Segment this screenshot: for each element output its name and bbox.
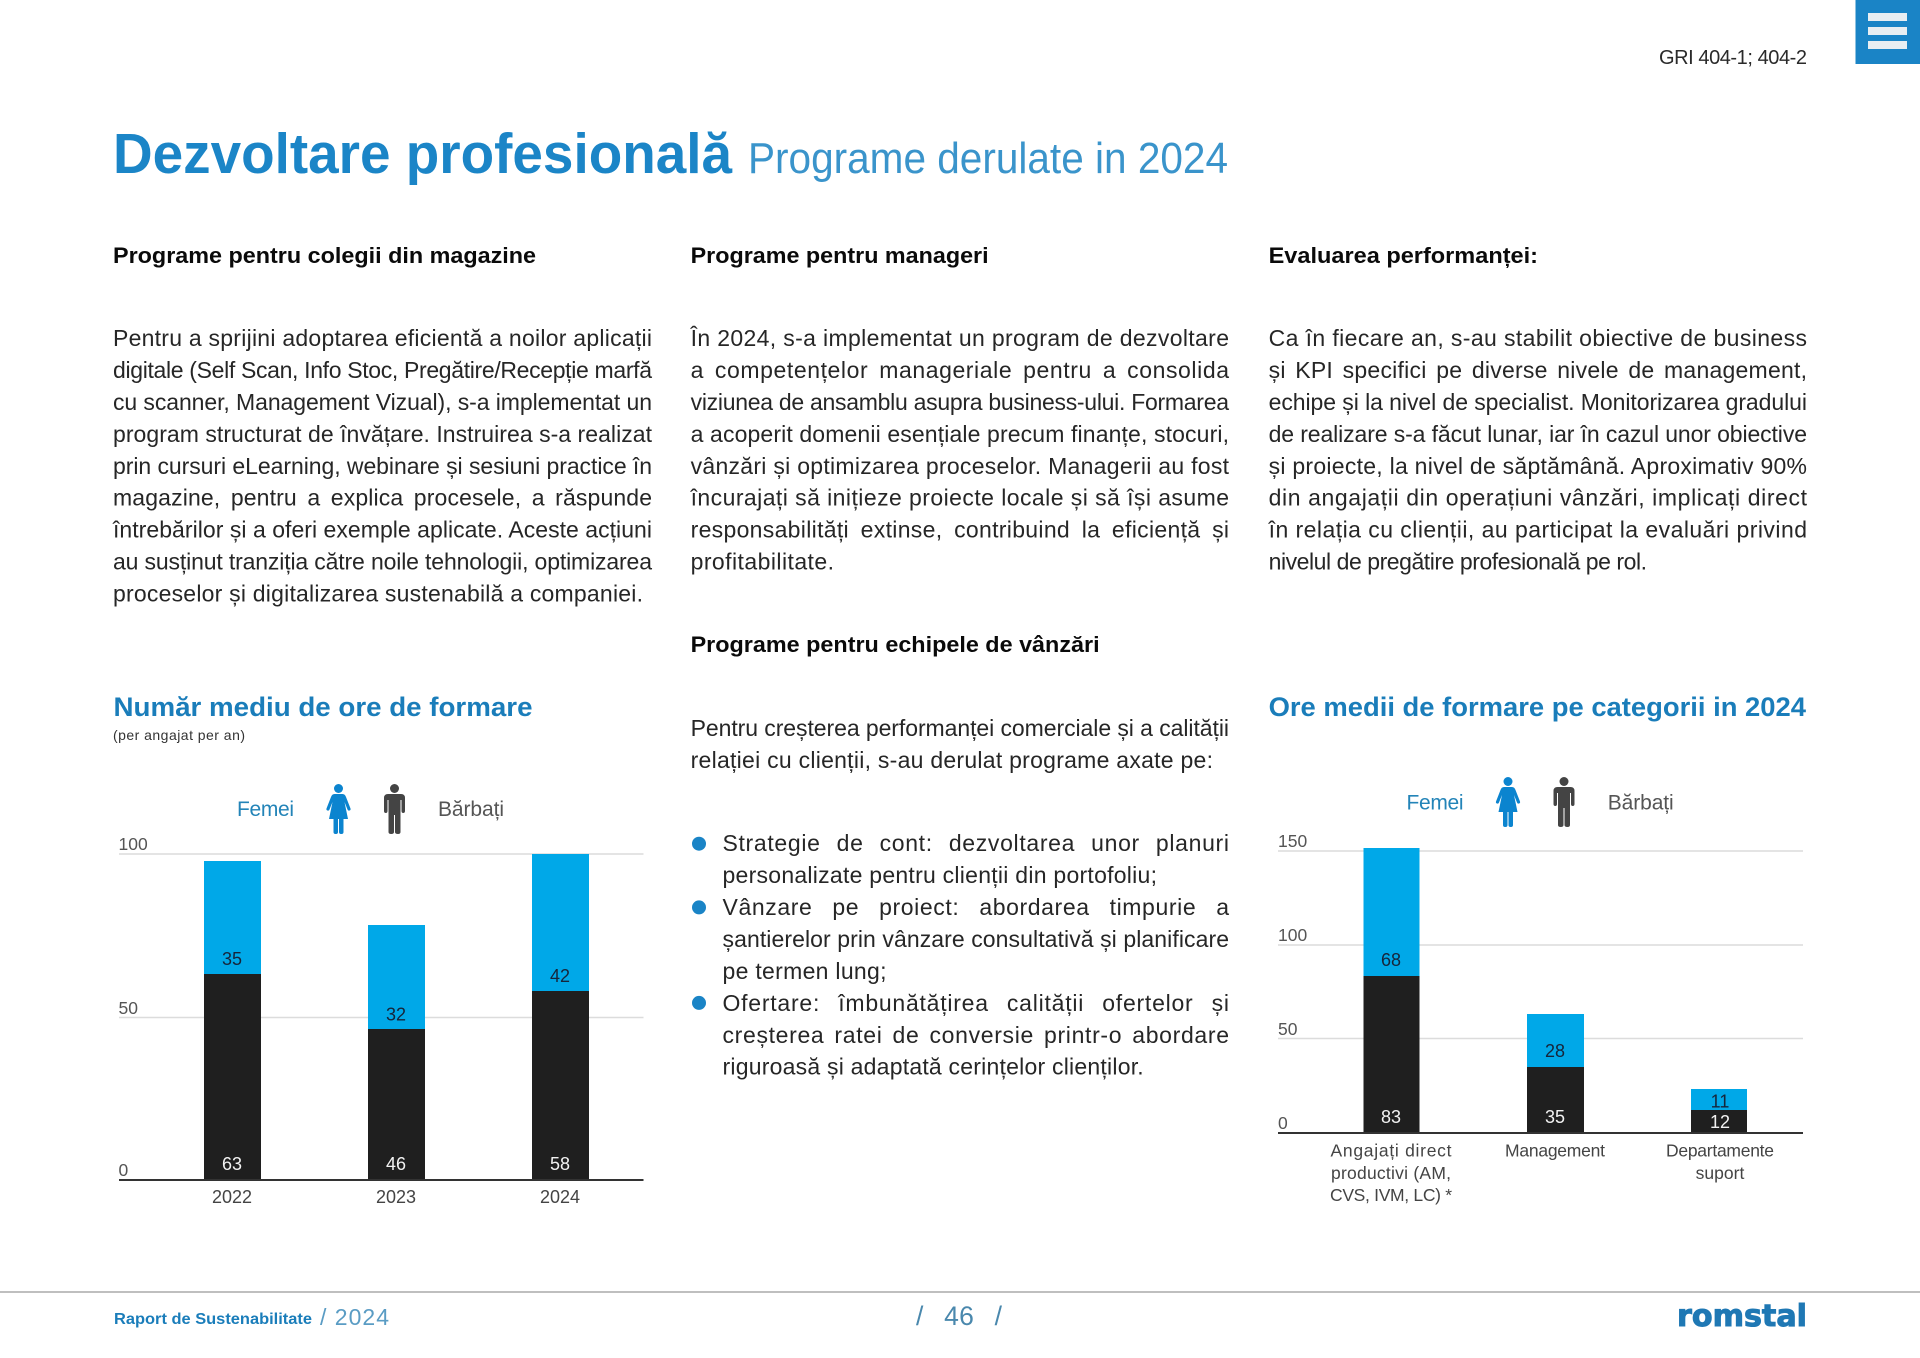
y axis gridlines and labels: 150 [1278, 831, 1307, 851]
text block: colegii din magazine: digitale (Self Scan, Info Stoc, Pregătire/Recepție marfă [113, 357, 652, 383]
bullet list: pe termen lung; [722, 958, 886, 984]
y axis gridlines and labels: 50 [1278, 1019, 1298, 1039]
bar 2022: 35 [222, 949, 242, 969]
bar 2022 [204, 861, 261, 1207]
bar angajați direct productivi: Angajați direct [1330, 1140, 1452, 1160]
bullet list: creșterea ratei de conversie printr-o abordare [722, 1022, 1229, 1048]
GRI reference: GRI 404-1; 404-2 [1659, 47, 1807, 69]
footer: year: / 2024 [320, 1304, 389, 1330]
legend: femei și bărbați: Bărbați [438, 798, 504, 821]
bar departamente suport: 11 [1711, 1092, 1729, 1112]
bullet list: Vânzare pe proiect: abordarea timpurie a [722, 894, 1229, 920]
legend: femei și bărbați: Bărbați [1608, 792, 1674, 814]
text block: introducere vânzări: relației cu clienții, s-au derulat programe axate pe: [691, 747, 1213, 773]
bar angajați direct productivi: 83 [1381, 1107, 1401, 1127]
footer: page number: / 46 / [916, 1301, 1003, 1331]
text block: colegii din magazine: magazine, pentru a explica procesele, a răspunde [113, 484, 652, 510]
title [113, 122, 1228, 186]
bar departamente suport [1666, 1089, 1774, 1183]
y axis gridlines and labels: 0 [118, 1160, 128, 1180]
text block: evaluarea performanței: Ca în fiecare an, s-au stabilit obiective de business [1269, 325, 1807, 351]
text block: introducere vânzări [691, 715, 1229, 773]
bullet list: personalizate pentru clienții din portofoliu; [722, 862, 1157, 888]
text block: manageri: profitabilitate. [691, 548, 834, 574]
text block: colegii din magazine: Pentru a sprijini adoptarea eficientă a noilor aplicații [113, 325, 652, 351]
text block: evaluarea performanței: din angajații din operațiuni vânzări, implicați direct [1269, 484, 1808, 510]
bar 2024: 2024 [540, 1187, 580, 1207]
footer [0, 1292, 1920, 1334]
bar 2024 [532, 854, 589, 1207]
bullet list [692, 830, 1229, 1080]
bar 2023 [368, 925, 425, 1207]
y axis gridlines and labels: 100 [1278, 925, 1307, 945]
heading: echipele de vânzări: Programe pentru echipele de vânzări [691, 632, 1100, 657]
text block: manageri [690, 325, 1230, 574]
legend: femei și bărbați: Femei [237, 798, 294, 821]
bar 2022: 63 [222, 1154, 242, 1174]
bar 2024: 58 [550, 1154, 570, 1174]
bar departamente suport: suport [1696, 1163, 1744, 1183]
bar management [1505, 1014, 1605, 1160]
text block: manageri: responsabilități extinse, contribuind la eficiență și [691, 516, 1229, 542]
text block: manageri: încurajați să inițieze proiecte locale și să își asume [690, 484, 1229, 510]
bar 2022: 2022 [212, 1187, 252, 1207]
icon: man [1554, 777, 1574, 827]
text block: evaluarea performanței: în relația cu clienții, au participat la evaluări privind [1268, 516, 1807, 542]
heading: număr mediu de ore: Număr mediu de ore de formare [114, 692, 532, 722]
y axis gridlines and labels: 0 [1278, 1113, 1288, 1133]
bar management: 35 [1545, 1107, 1565, 1127]
text block: manageri: a competențelor manageriale pentru a consolida [691, 357, 1229, 383]
title: Programe derulate in 2024 [748, 134, 1228, 183]
bar 2023: 46 [386, 1154, 406, 1174]
text block: colegii din magazine [112, 325, 653, 606]
legend: femei și bărbați [1406, 777, 1674, 827]
bar angajați direct productivi: 68 [1381, 950, 1401, 970]
note: per angajat per an: (per angajat per an) [113, 727, 245, 743]
text block: colegii din magazine: au susținut tranziția către noile tehnologii, optimizarea [113, 548, 652, 574]
icon: menu tab [1856, 0, 1920, 64]
text block: introducere vânzări: Pentru creșterea performanței comerciale și a calității [691, 715, 1229, 741]
bar angajați direct productivi: CVS, IVM, LC) * [1330, 1185, 1452, 1205]
text block: evaluarea performanței: de realizare s-a făcut lunar, iar în cazul unor obiective [1269, 421, 1807, 447]
panel: chart ore medii pe categorii [1269, 692, 1806, 1205]
text block: evaluarea performanței: echipe și la nivel de specialist. Monitorizarea gradului [1269, 389, 1807, 415]
text block: colegii din magazine: program structurat de învățare. Instruirea s-a realizat [113, 421, 653, 447]
icon: woman [326, 784, 351, 834]
text block: evaluarea performanței: și KPI specifici pe diverse nivele de management, [1269, 357, 1807, 383]
bullet list: riguroasă și adaptată cerințelor clienților. [722, 1054, 1144, 1080]
y axis gridlines and labels: 50 [118, 998, 138, 1018]
panel: evaluarea performanței [1268, 243, 1808, 574]
text block: manageri: viziunea de ansamblu asupra business-ului. Formarea [691, 389, 1229, 415]
icon: woman [1496, 777, 1520, 827]
bar management: 28 [1545, 1041, 1565, 1061]
y axis gridlines and labels [118, 834, 644, 1180]
footer: report name: Raport de Sustenabilitate [114, 1311, 312, 1328]
heading: manageri: Programe pentru manageri [691, 243, 989, 268]
heading: colegii din magazine: Programe pentru colegii din magazine [113, 243, 536, 268]
text block: manageri: În 2024, s-a implementat un program de dezvoltare [690, 325, 1229, 351]
text block: colegii din magazine: prin cursuri eLearning, webinare și sesiuni practice în [113, 453, 652, 479]
text block: colegii din magazine: cu scanner, Management Vizual), s-a implementat un [113, 389, 652, 415]
panel: programe pentru colegii din magazine [112, 243, 653, 606]
bullet list: Strategie de cont: dezvoltarea unor planuri [722, 830, 1229, 856]
text block: manageri: vânzări și optimizarea proceselor. Managerii au fost [691, 453, 1230, 479]
heading: ore medii pe categorii: Ore medii de formare pe categorii in 2024 [1269, 692, 1806, 722]
y axis gridlines and labels: 100 [118, 834, 148, 854]
bar departamente suport: 12 [1710, 1112, 1730, 1132]
text block: colegii din magazine: întrebărilor și a oferi exemple aplicate. Aceste acțiuni [112, 516, 652, 542]
panel: programe pentru manageri [690, 243, 1230, 574]
text block: evaluarea performanței: nivelul de pregătire profesională pe rol. [1269, 548, 1647, 574]
y axis gridlines and labels [1278, 831, 1803, 1133]
panel: chart număr mediu de ore de formare [113, 692, 644, 1207]
bar 2023: 32 [386, 1004, 406, 1024]
bar angajați direct productivi [1330, 848, 1452, 1205]
text block: manageri: a acoperit domenii esențiale precum finanțe, stocuri, [691, 421, 1229, 447]
bar angajați direct productivi: productivi (AM, [1331, 1163, 1451, 1183]
text block: colegii din magazine: proceselor și digitalizarea sustenabilă a companiei. [113, 580, 643, 606]
bar 2023: 2023 [376, 1187, 416, 1207]
bar 2024: 42 [550, 966, 570, 986]
heading: evaluarea performanței: Evaluarea performanței: [1269, 243, 1538, 268]
text block: evaluarea performanței [1268, 325, 1808, 574]
bar departamente suport: Departamente [1666, 1140, 1774, 1160]
bullet list: șantierelor prin vânzare consultativă și planificare [722, 926, 1229, 952]
logo: romstal: romstal [1677, 1299, 1807, 1334]
title: Dezvoltare profesională [113, 122, 733, 186]
bar management: Management [1505, 1140, 1605, 1160]
legend: femei și bărbați [237, 784, 504, 834]
icon: man [384, 784, 405, 834]
text block: evaluarea performanței: și proiecte, la nivel de săptămână. Aproximativ 90% [1269, 453, 1807, 479]
bullet list: Ofertare: îmbunătățirea calității ofertelor și [722, 990, 1229, 1016]
legend: femei și bărbați: Femei [1406, 792, 1464, 814]
panel: programe pentru echipele de vânzări [691, 632, 1229, 1080]
